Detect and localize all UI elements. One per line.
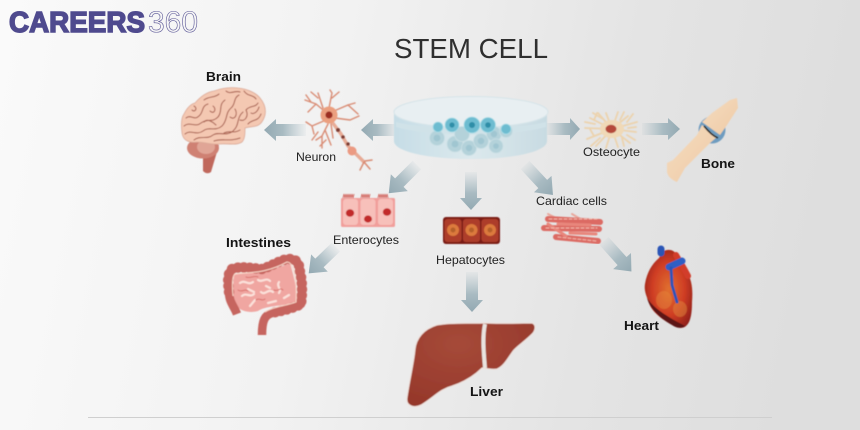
label: Liver: Liver — [470, 385, 503, 399]
icon: petri dish with stem cells — [394, 96, 548, 159]
label: Cardiac cells: Cardiac cells — [536, 194, 607, 208]
logo: Careers360: 360 — [148, 6, 198, 39]
arrow: dish to hepatocytes — [460, 172, 482, 210]
arrow: dish to cardiac cells — [516, 157, 562, 203]
icon: brain — [181, 88, 265, 173]
icon: cardiac cells — [544, 214, 600, 241]
arrow: dish to enterocytes — [380, 157, 425, 202]
icon: neuron — [305, 90, 372, 170]
arrow: osteocyte to bone — [642, 118, 680, 140]
stem cells — [430, 117, 512, 156]
icon: osteocyte — [585, 112, 637, 148]
arrow: cardiac cells to heart — [595, 233, 640, 279]
label: Enterocytes: Enterocytes — [333, 233, 399, 247]
arrow: dish to osteocyte — [546, 118, 580, 140]
icon: enterocytes — [341, 194, 395, 227]
arrow: enterocytes to intestines — [300, 238, 344, 282]
label: Brain: Brain — [206, 70, 241, 84]
logo: Careers360: CAREERS — [9, 7, 145, 39]
arrow: dish to neuron — [361, 119, 397, 141]
icon: intestines — [228, 259, 302, 335]
icon: heart — [645, 249, 692, 328]
label: Neuron: Neuron — [296, 150, 336, 164]
arrow: neuron to brain — [264, 119, 306, 141]
label: Bone: Bone — [701, 157, 735, 171]
label: Hepatocytes: Hepatocytes — [436, 253, 505, 267]
label: Osteocyte: Osteocyte — [583, 145, 640, 159]
label: Intestines: Intestines — [226, 236, 291, 250]
icon: bone — [667, 98, 738, 182]
arrow: hepatocytes to liver — [461, 272, 483, 312]
title: STEM CELL — [394, 33, 548, 64]
label: Heart: Heart — [624, 319, 660, 333]
icon: liver — [407, 323, 535, 407]
icon: hepatocytes — [443, 217, 500, 244]
